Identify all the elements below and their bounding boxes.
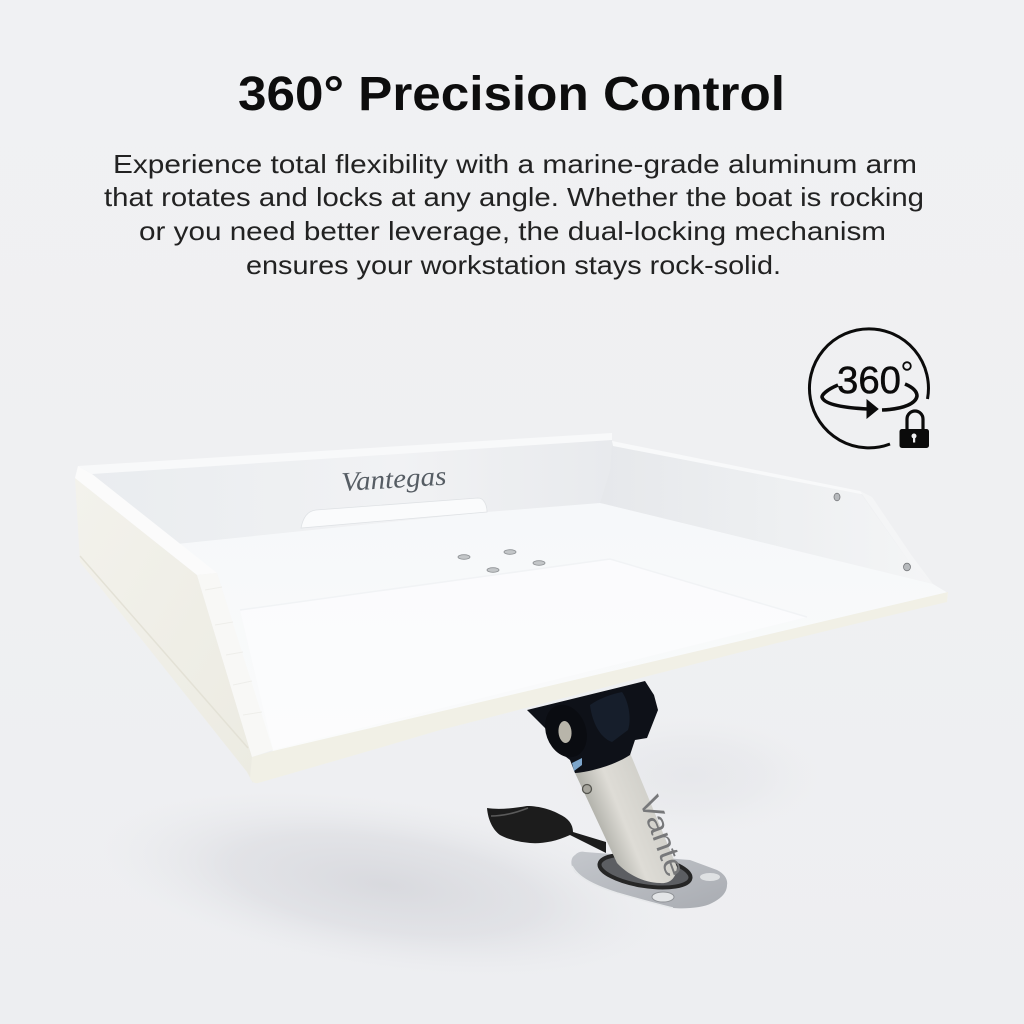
tray front thickness — [250, 592, 948, 783]
back wall top edge — [78, 433, 612, 474]
product: mount arm — [487, 681, 727, 908]
right wall top edge — [612, 441, 866, 495]
cut face texture — [205, 587, 262, 715]
icon degree mark — [903, 362, 911, 370]
icon: 360 rotation lock — [809, 329, 929, 448]
tube set screw — [582, 784, 592, 794]
icon number: 360 — [837, 360, 901, 402]
right wall screws — [834, 493, 910, 571]
tube brand text: Vante — [632, 791, 691, 881]
floor highlight panel — [240, 559, 807, 750]
icon ring — [809, 329, 928, 448]
brand name: Vantegas — [341, 461, 447, 497]
left wall cut face — [197, 573, 273, 757]
locking knob clamp — [527, 681, 658, 773]
icon rotation arrow — [822, 384, 917, 418]
aluminum tube — [575, 753, 677, 883]
ground shadow — [91, 715, 820, 1009]
description text: ensures your workstation stays rock-solid. — [246, 250, 781, 280]
product: cutting tray — [75, 433, 948, 783]
left wall top rail — [75, 466, 217, 575]
description text: that rotates and locks at any angle. Whether the boat is rocking — [104, 182, 924, 212]
description text: Experience total flexibility with a marine-grade aluminum arm — [113, 149, 917, 179]
floor panel edge — [240, 559, 807, 617]
description text — [104, 149, 924, 280]
lanyard cap — [487, 806, 606, 853]
left wall outer face — [75, 478, 253, 783]
tray floor — [177, 503, 948, 752]
floor mounting screws — [458, 550, 545, 572]
mount base plate — [571, 849, 727, 908]
description text: or you need better leverage, the dual-locking mechanism — [139, 216, 886, 246]
right wall — [600, 442, 933, 584]
back wall — [78, 434, 612, 544]
icon padlock — [900, 411, 929, 448]
title: 360° Precision Control — [238, 68, 785, 121]
left wall lower seam — [80, 556, 248, 748]
right wall angled edge — [860, 491, 933, 584]
handle slot — [301, 498, 487, 528]
